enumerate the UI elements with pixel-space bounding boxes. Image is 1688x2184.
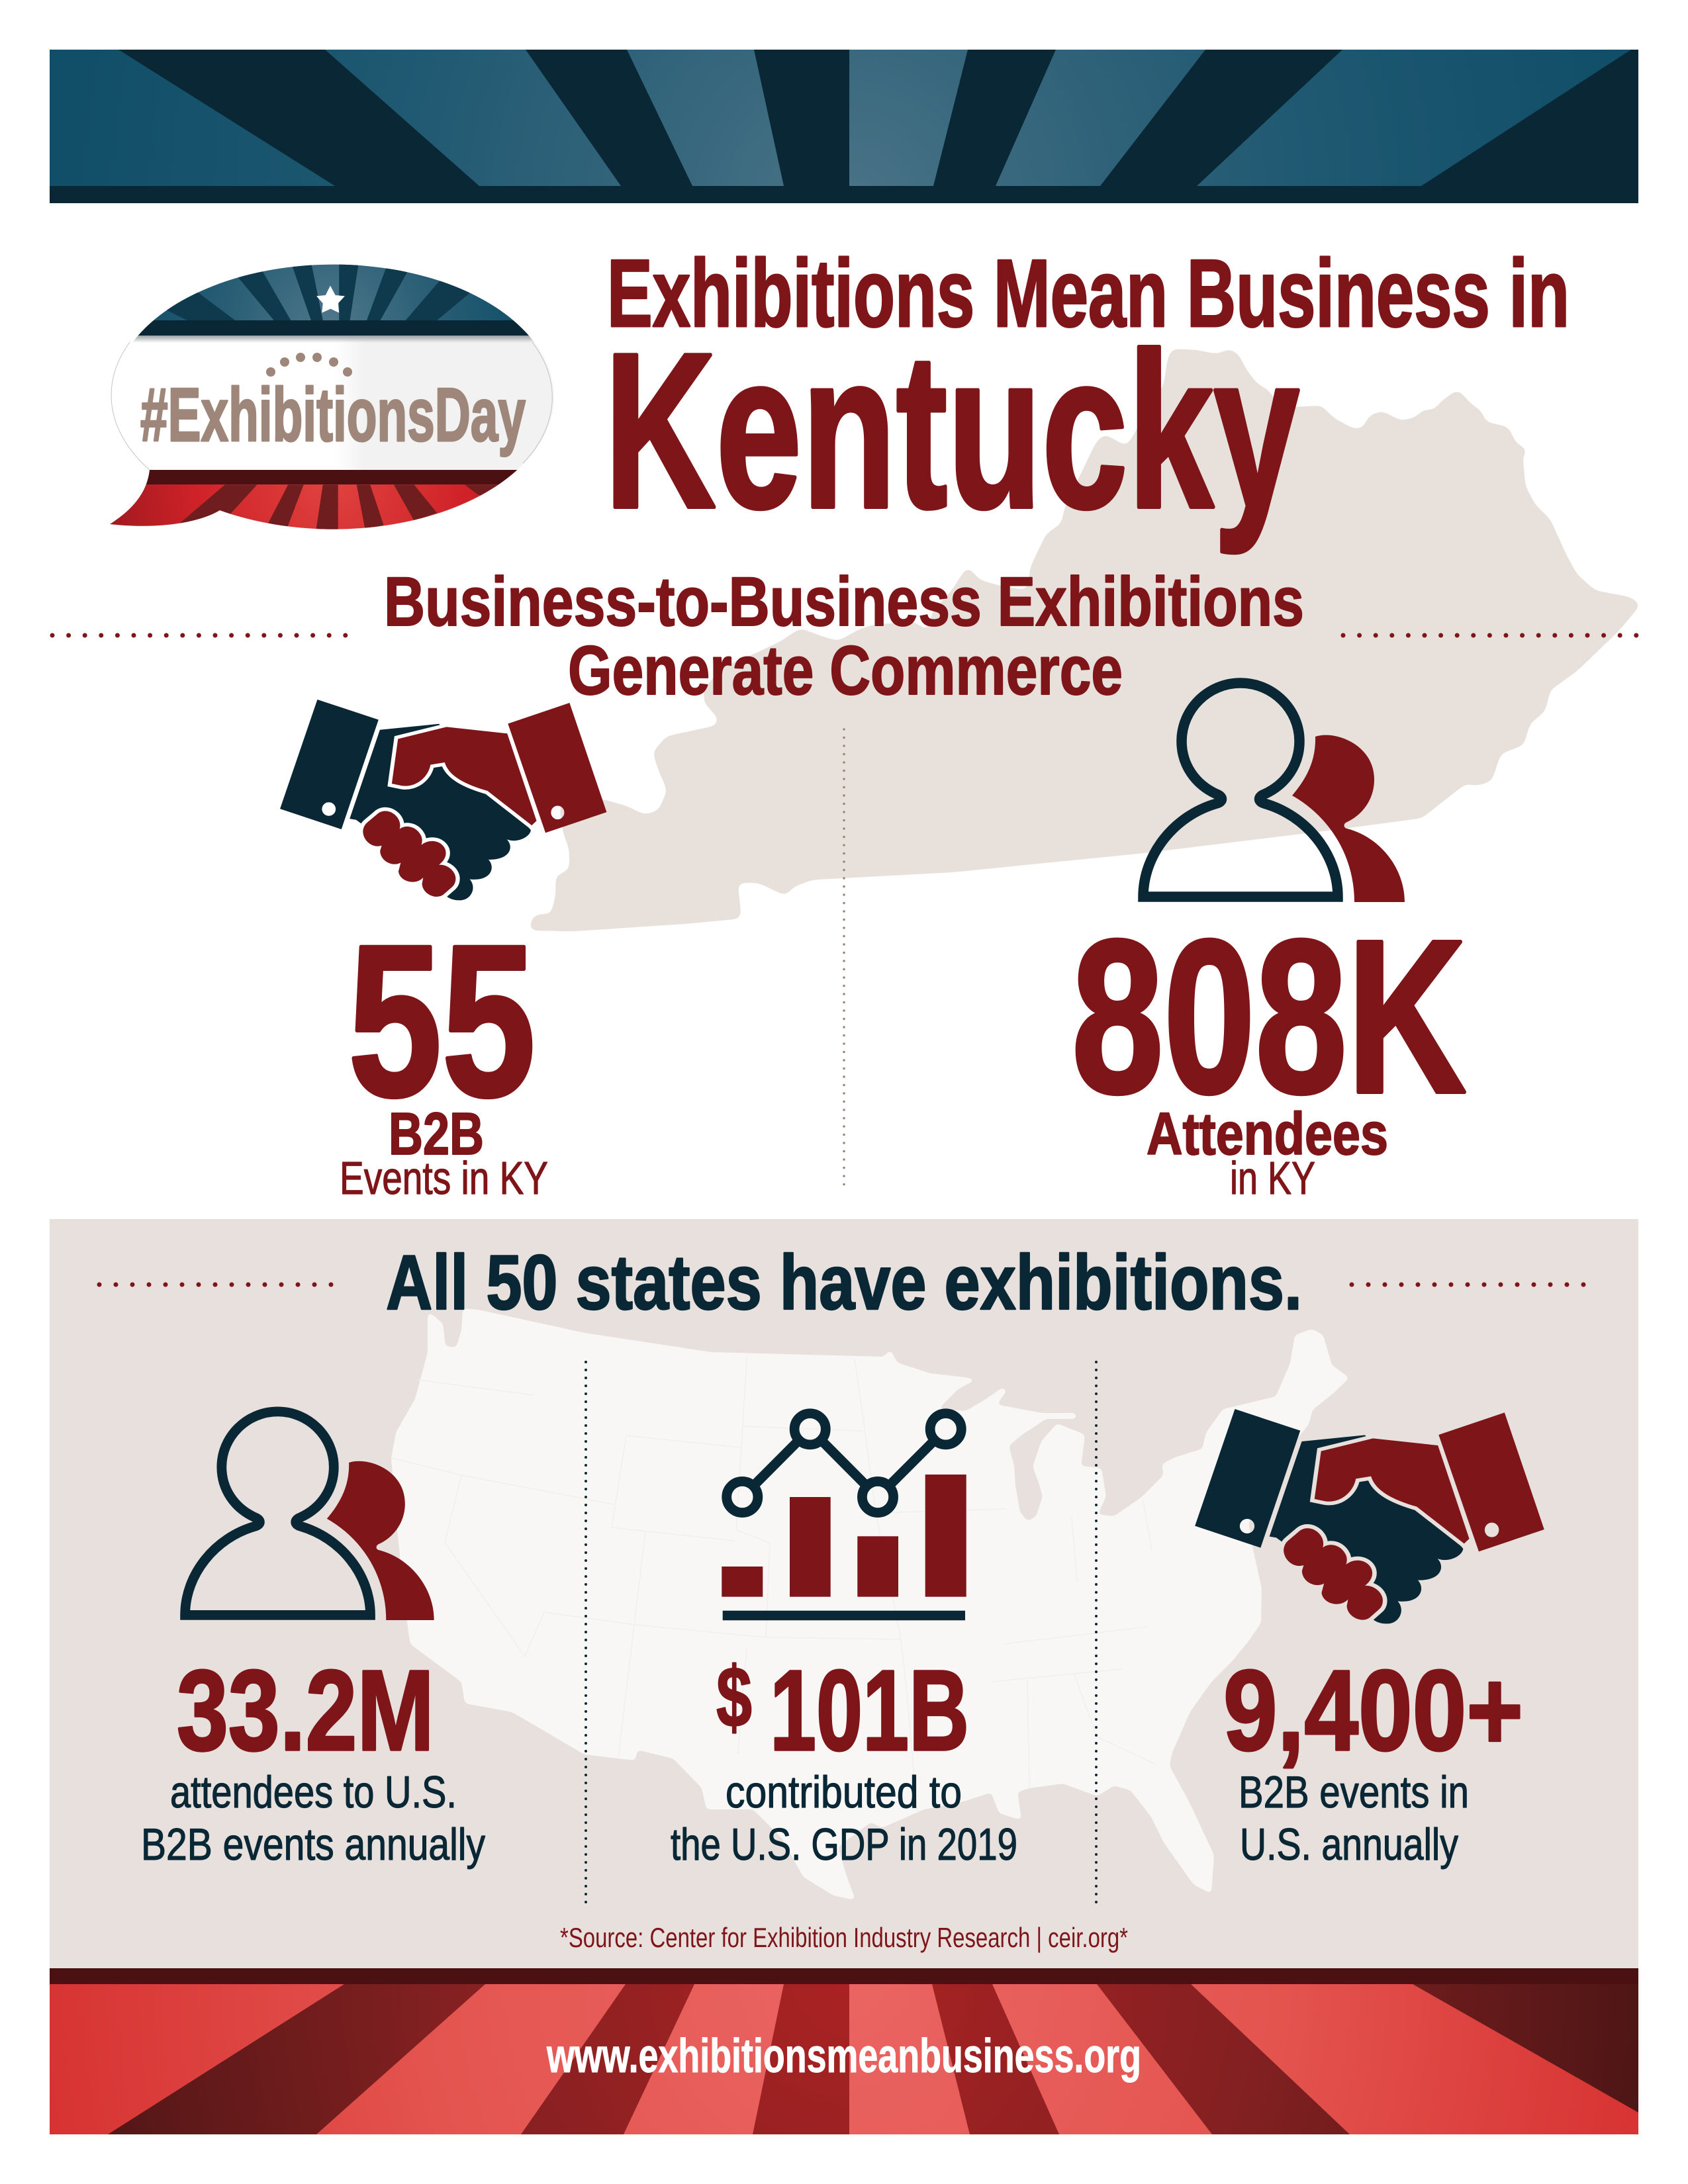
stat: 9,400+ events	[1223, 1646, 1523, 1870]
stat: 33.2M attendees	[141, 1646, 485, 1870]
stat: 9,400+ events: 9,400+	[1223, 1646, 1523, 1774]
stat: 55 B2B events: B2B	[389, 1101, 484, 1167]
icon: handshake Kentucky	[280, 700, 606, 900]
logo: ExhibitionsDay speech bubble	[99, 253, 563, 531]
stat: 808K attendees	[1072, 894, 1466, 1204]
icon: handshake U.S.	[1195, 1409, 1544, 1623]
title: Kentucky: Kentucky	[604, 307, 1300, 555]
website url: www.exhibitionsmeanbusiness.org	[546, 2030, 1141, 2083]
logo dotted arc	[266, 353, 352, 377]
source note: *Source: Center for Exhibition Industry Research | ceir.org*	[560, 1922, 1128, 1953]
bottom banner	[50, 1968, 1638, 2134]
top banner	[50, 50, 1638, 203]
icon: attendees Kentucky	[1143, 683, 1405, 902]
Kentucky state map background	[531, 351, 1638, 930]
stat: $101B GDP: the U.S. GDP in 2019	[671, 1819, 1017, 1870]
stat: $101B GDP: 101B	[770, 1646, 969, 1774]
panel: all 50 states	[50, 1219, 1638, 1968]
icon: attendees U.S.	[185, 1412, 434, 1620]
stat: 9,400+ events: U.S. annually	[1240, 1819, 1458, 1870]
icon: chart	[722, 1414, 966, 1620]
stat: 55 B2B events: 55	[348, 901, 536, 1142]
stat: 33.2M attendees: 33.2M	[177, 1646, 434, 1774]
stat: $101B GDP	[671, 1646, 1017, 1870]
stat: 33.2M attendees: B2B events annually	[141, 1819, 485, 1870]
stat: $101B GDP: $	[716, 1649, 752, 1745]
icon: logo star	[316, 286, 345, 313]
heading: all 50 states: All 50 states have exhibitions.	[386, 1239, 1302, 1326]
stat: 808K attendees: 808K	[1072, 894, 1466, 1138]
section heading: business to business	[384, 563, 1304, 709]
stat: 33.2M attendees: attendees to U.S.	[170, 1767, 457, 1817]
stat: 9,400+ events: B2B events in	[1239, 1767, 1469, 1817]
section heading: business to business: Generate Commerce	[568, 632, 1123, 709]
US map background	[392, 1309, 1348, 1899]
logo hashtag text: #ExhibitionsDay	[140, 373, 526, 457]
stat: $101B GDP: contributed to	[726, 1767, 962, 1817]
stat: 808K attendees: Attendees	[1147, 1101, 1388, 1167]
section heading: business to business: Business-to-Business Exhibitions	[384, 563, 1304, 641]
stat: 55 B2B events	[340, 901, 548, 1204]
stat: 808K attendees: in KY	[1230, 1152, 1315, 1204]
stat: 55 B2B events: Events in KY	[340, 1152, 548, 1204]
